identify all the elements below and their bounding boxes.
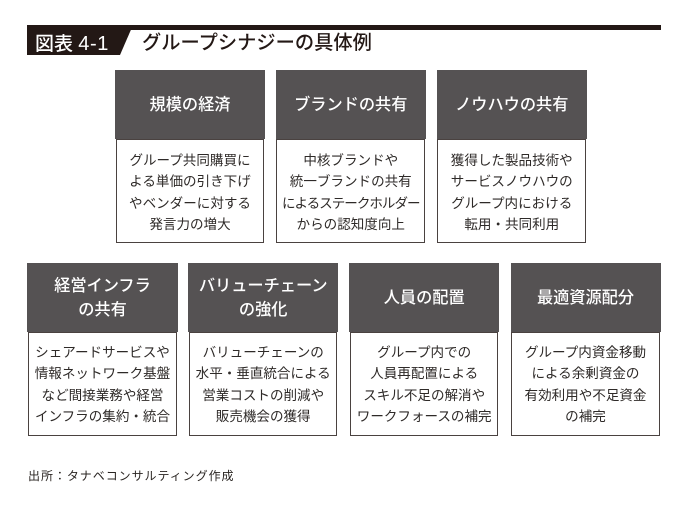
card: ノウハウの共有: サービスノウハウの [451,174,573,189]
card: ブランドの共有: によるステークホルダー [282,196,420,210]
card: 経営インフラの共有: シェアードサービスや [35,345,170,360]
card: ノウハウの共有: ノウハウの共有 [455,96,568,114]
card: 人員の配置: グループ内での [377,345,471,360]
card: バリューチェーンの強化: 販売機会の獲得 [216,409,311,424]
card: バリューチェーンの強化: 水平・垂直統合による [196,366,331,381]
card: バリューチェーンの強化: の強化 [239,300,287,318]
card: 経営インフラの共有: インフラの集約・統合 [35,409,170,424]
card: 最適資源配分: による余剰資金の [532,366,639,381]
card: ブランドの共有: ブランドの共有 [294,96,407,114]
top rule [27,25,661,30]
card: 最適資源配分: 最適資源配分 [537,288,634,306]
card: 経営インフラの共有: 情報ネットワーク基盤 [35,366,170,381]
card: バリューチェーンの強化 [188,263,338,436]
card: ブランドの共有: 統一ブランドの共有 [290,174,412,189]
card: ノウハウの共有: グループ内における [451,196,572,210]
card: 人員の配置: 人員の配置 [384,288,465,306]
card: 人員の配置: 人員再配置による [370,366,478,381]
card: 規模の経済: よる単価の引き下げ [129,174,251,189]
figure label: 図表 4-1 [35,33,109,55]
card: 最適資源配分: グループ内資金移動 [525,345,646,360]
card: 最適資源配分: 有効利用や不足資金 [525,388,646,403]
card: 規模の経済 [115,70,265,243]
source note: 出所：タナベコンサルティング作成 [28,469,234,483]
card: ブランドの共有: 中核ブランドや [303,152,398,168]
card: 最適資源配分: の補完 [565,409,606,424]
card: 人員の配置: スキル不足の解消や [363,388,485,403]
card: 最適資源配分 [511,263,661,436]
card: バリューチェーンの強化: バリューチェーン [199,276,328,294]
card: 経営インフラの共有: など間接業務や経営 [42,388,163,403]
card: 経営インフラの共有: 経営インフラ [54,276,151,294]
card: 経営インフラの共有: の共有 [78,300,127,318]
title: グループシナジーの具体例 [142,32,372,54]
card: バリューチェーンの強化: 営業コストの削減や [202,388,324,403]
card: ノウハウの共有 [437,70,587,243]
card: ノウハウの共有: 獲得した製品技術や [451,152,573,168]
card: 規模の経済: やベンダーに対する [129,196,251,210]
card: ブランドの共有 [276,70,426,243]
card: 人員の配置: ワークフォースの補完 [357,409,492,424]
card: 規模の経済: 規模の経済 [150,96,230,114]
card: ブランドの共有: からの認知度向上 [297,217,405,232]
card: 規模の経済: 発言力の増大 [149,217,231,232]
figure label [27,30,131,55]
card: バリューチェーンの強化: バリューチェーンの [203,345,324,360]
card: ノウハウの共有: 転用・共同利用 [464,217,559,232]
card: 経営インフラの共有 [27,263,178,436]
card: 人員の配置 [349,263,499,436]
card: 規模の経済: グループ共同購買に [129,152,251,168]
